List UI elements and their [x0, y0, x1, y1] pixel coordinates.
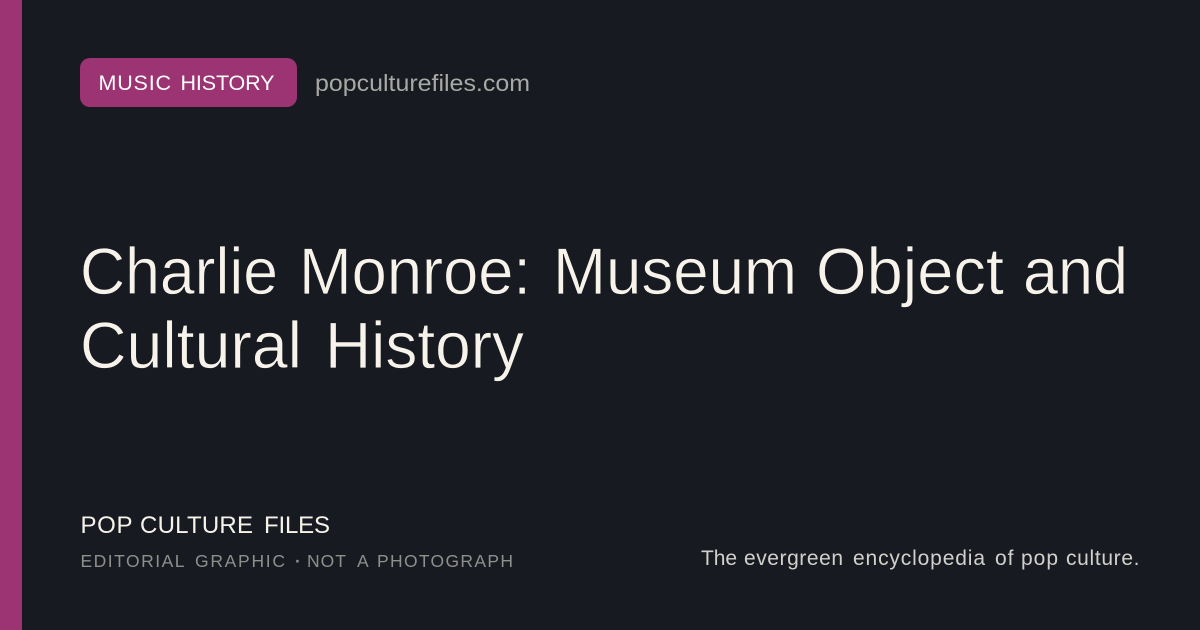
- editorial note: GRAPHIC: [195, 551, 285, 571]
- tagline: culture.: [1066, 547, 1140, 570]
- editorial note: A: [357, 551, 369, 571]
- tagline: of: [995, 547, 1014, 570]
- brand name: FILES: [264, 512, 330, 539]
- badge label: HISTORY: [180, 71, 274, 95]
- title: History: [325, 308, 524, 382]
- tagline: The: [701, 547, 737, 570]
- badge label: MUSIC: [98, 71, 171, 95]
- editorial note: NOT: [307, 551, 346, 571]
- brand name: POP: [80, 512, 132, 539]
- title: Monroe:: [299, 234, 531, 308]
- title: and: [1023, 234, 1128, 308]
- editorial note: ·: [295, 551, 301, 571]
- accent bar: [0, 0, 22, 630]
- tagline: evergreen: [744, 547, 843, 570]
- editorial note: [80, 551, 513, 571]
- tagline: pop: [1021, 547, 1058, 570]
- title: Museum: [553, 234, 797, 308]
- brand name: [80, 512, 330, 539]
- tagline: [701, 547, 1140, 570]
- editorial note: EDITORIAL: [80, 551, 185, 571]
- brand name: CULTURE: [140, 512, 253, 539]
- title: Cultural: [80, 308, 302, 382]
- badge label: [98, 71, 274, 95]
- category badge: [80, 58, 297, 107]
- title: Object: [816, 234, 1004, 308]
- title: Charlie: [80, 234, 278, 308]
- tagline: encyclopedia: [853, 547, 985, 570]
- editorial note: PHOTOGRAPH: [377, 551, 513, 571]
- site domain: popculturefiles.com: [315, 70, 530, 96]
- title: [80, 234, 1128, 382]
